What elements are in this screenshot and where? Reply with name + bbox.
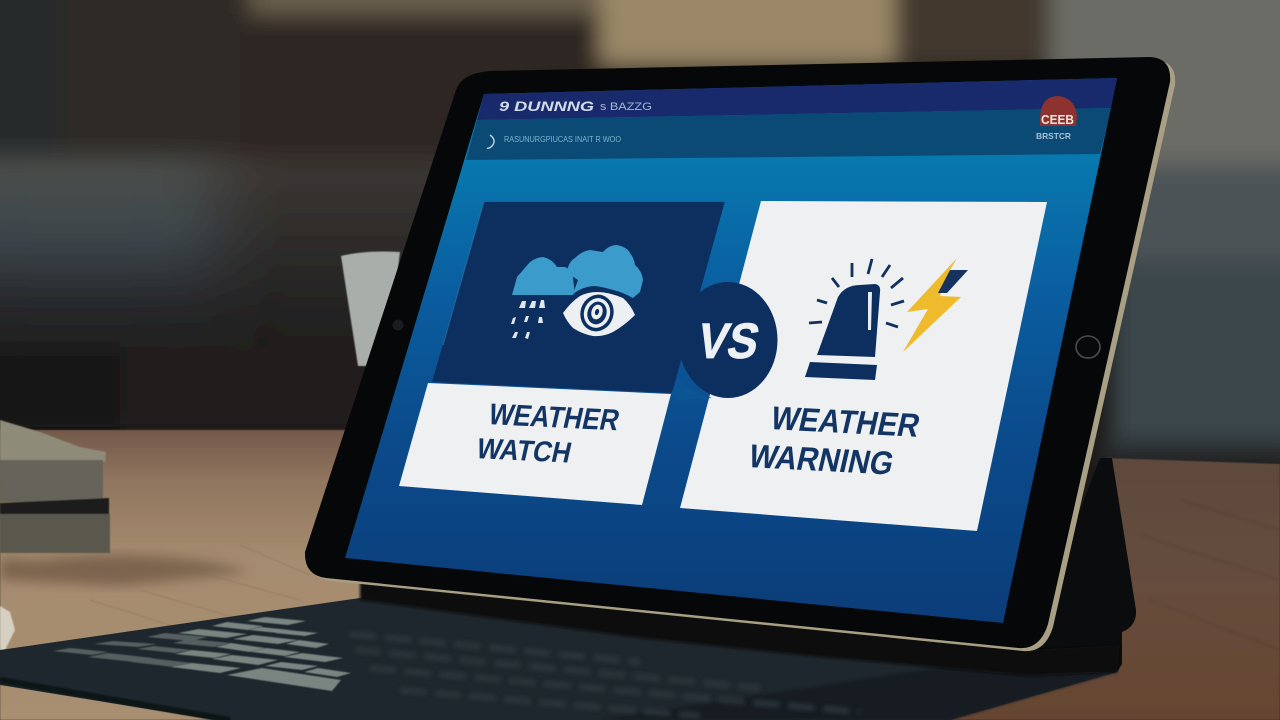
tablet stand xyxy=(1030,458,1136,672)
icon: rain clouds xyxy=(512,245,643,298)
panel: weather watch icon field xyxy=(432,201,725,393)
coffee cup xyxy=(341,252,400,366)
paper scrap xyxy=(0,606,15,650)
logo badge: CEEB xyxy=(1041,112,1074,127)
label: weather watch: WATCH xyxy=(473,433,574,469)
logo badge: BRSTCR xyxy=(1036,131,1071,141)
caption icon xyxy=(487,135,494,148)
panel: weather warning xyxy=(680,201,1047,531)
label: weather warning xyxy=(745,401,923,482)
faint keys xyxy=(350,634,860,716)
home button xyxy=(1076,336,1100,358)
vs badge xyxy=(671,282,778,400)
header caption: RASUNURGPIUCAS INAIT R WOO xyxy=(504,134,621,144)
second header band xyxy=(466,108,1111,160)
label: weather watch: WEATHER xyxy=(485,398,623,437)
screen xyxy=(345,78,1117,623)
icon: lightning bolt xyxy=(903,258,968,352)
top header band xyxy=(477,78,1117,120)
books stack xyxy=(0,420,110,553)
tablet gold edge xyxy=(310,60,1175,651)
icon: eye xyxy=(563,288,635,336)
keyboard xyxy=(0,598,1117,720)
header title: 9 DUNNNG xyxy=(499,98,594,114)
label: weather watch xyxy=(473,398,623,469)
label: weather warning: WARNING xyxy=(745,439,897,482)
keys: left block xyxy=(53,633,231,667)
keys: central block xyxy=(171,617,351,691)
label: weather warning: WEATHER xyxy=(767,401,923,445)
panel: weather watch label xyxy=(399,383,671,505)
icon: siren xyxy=(805,259,904,380)
table top xyxy=(0,430,1280,720)
hinge shadow xyxy=(360,582,1120,676)
tablet bezel xyxy=(305,57,1170,648)
icon: rain drops xyxy=(511,300,545,339)
logo badge xyxy=(1036,96,1077,141)
vs badge: VS xyxy=(693,313,765,369)
header subtitle: s BAZZG xyxy=(600,101,652,113)
tablet xyxy=(305,57,1175,651)
front camera xyxy=(392,320,404,330)
